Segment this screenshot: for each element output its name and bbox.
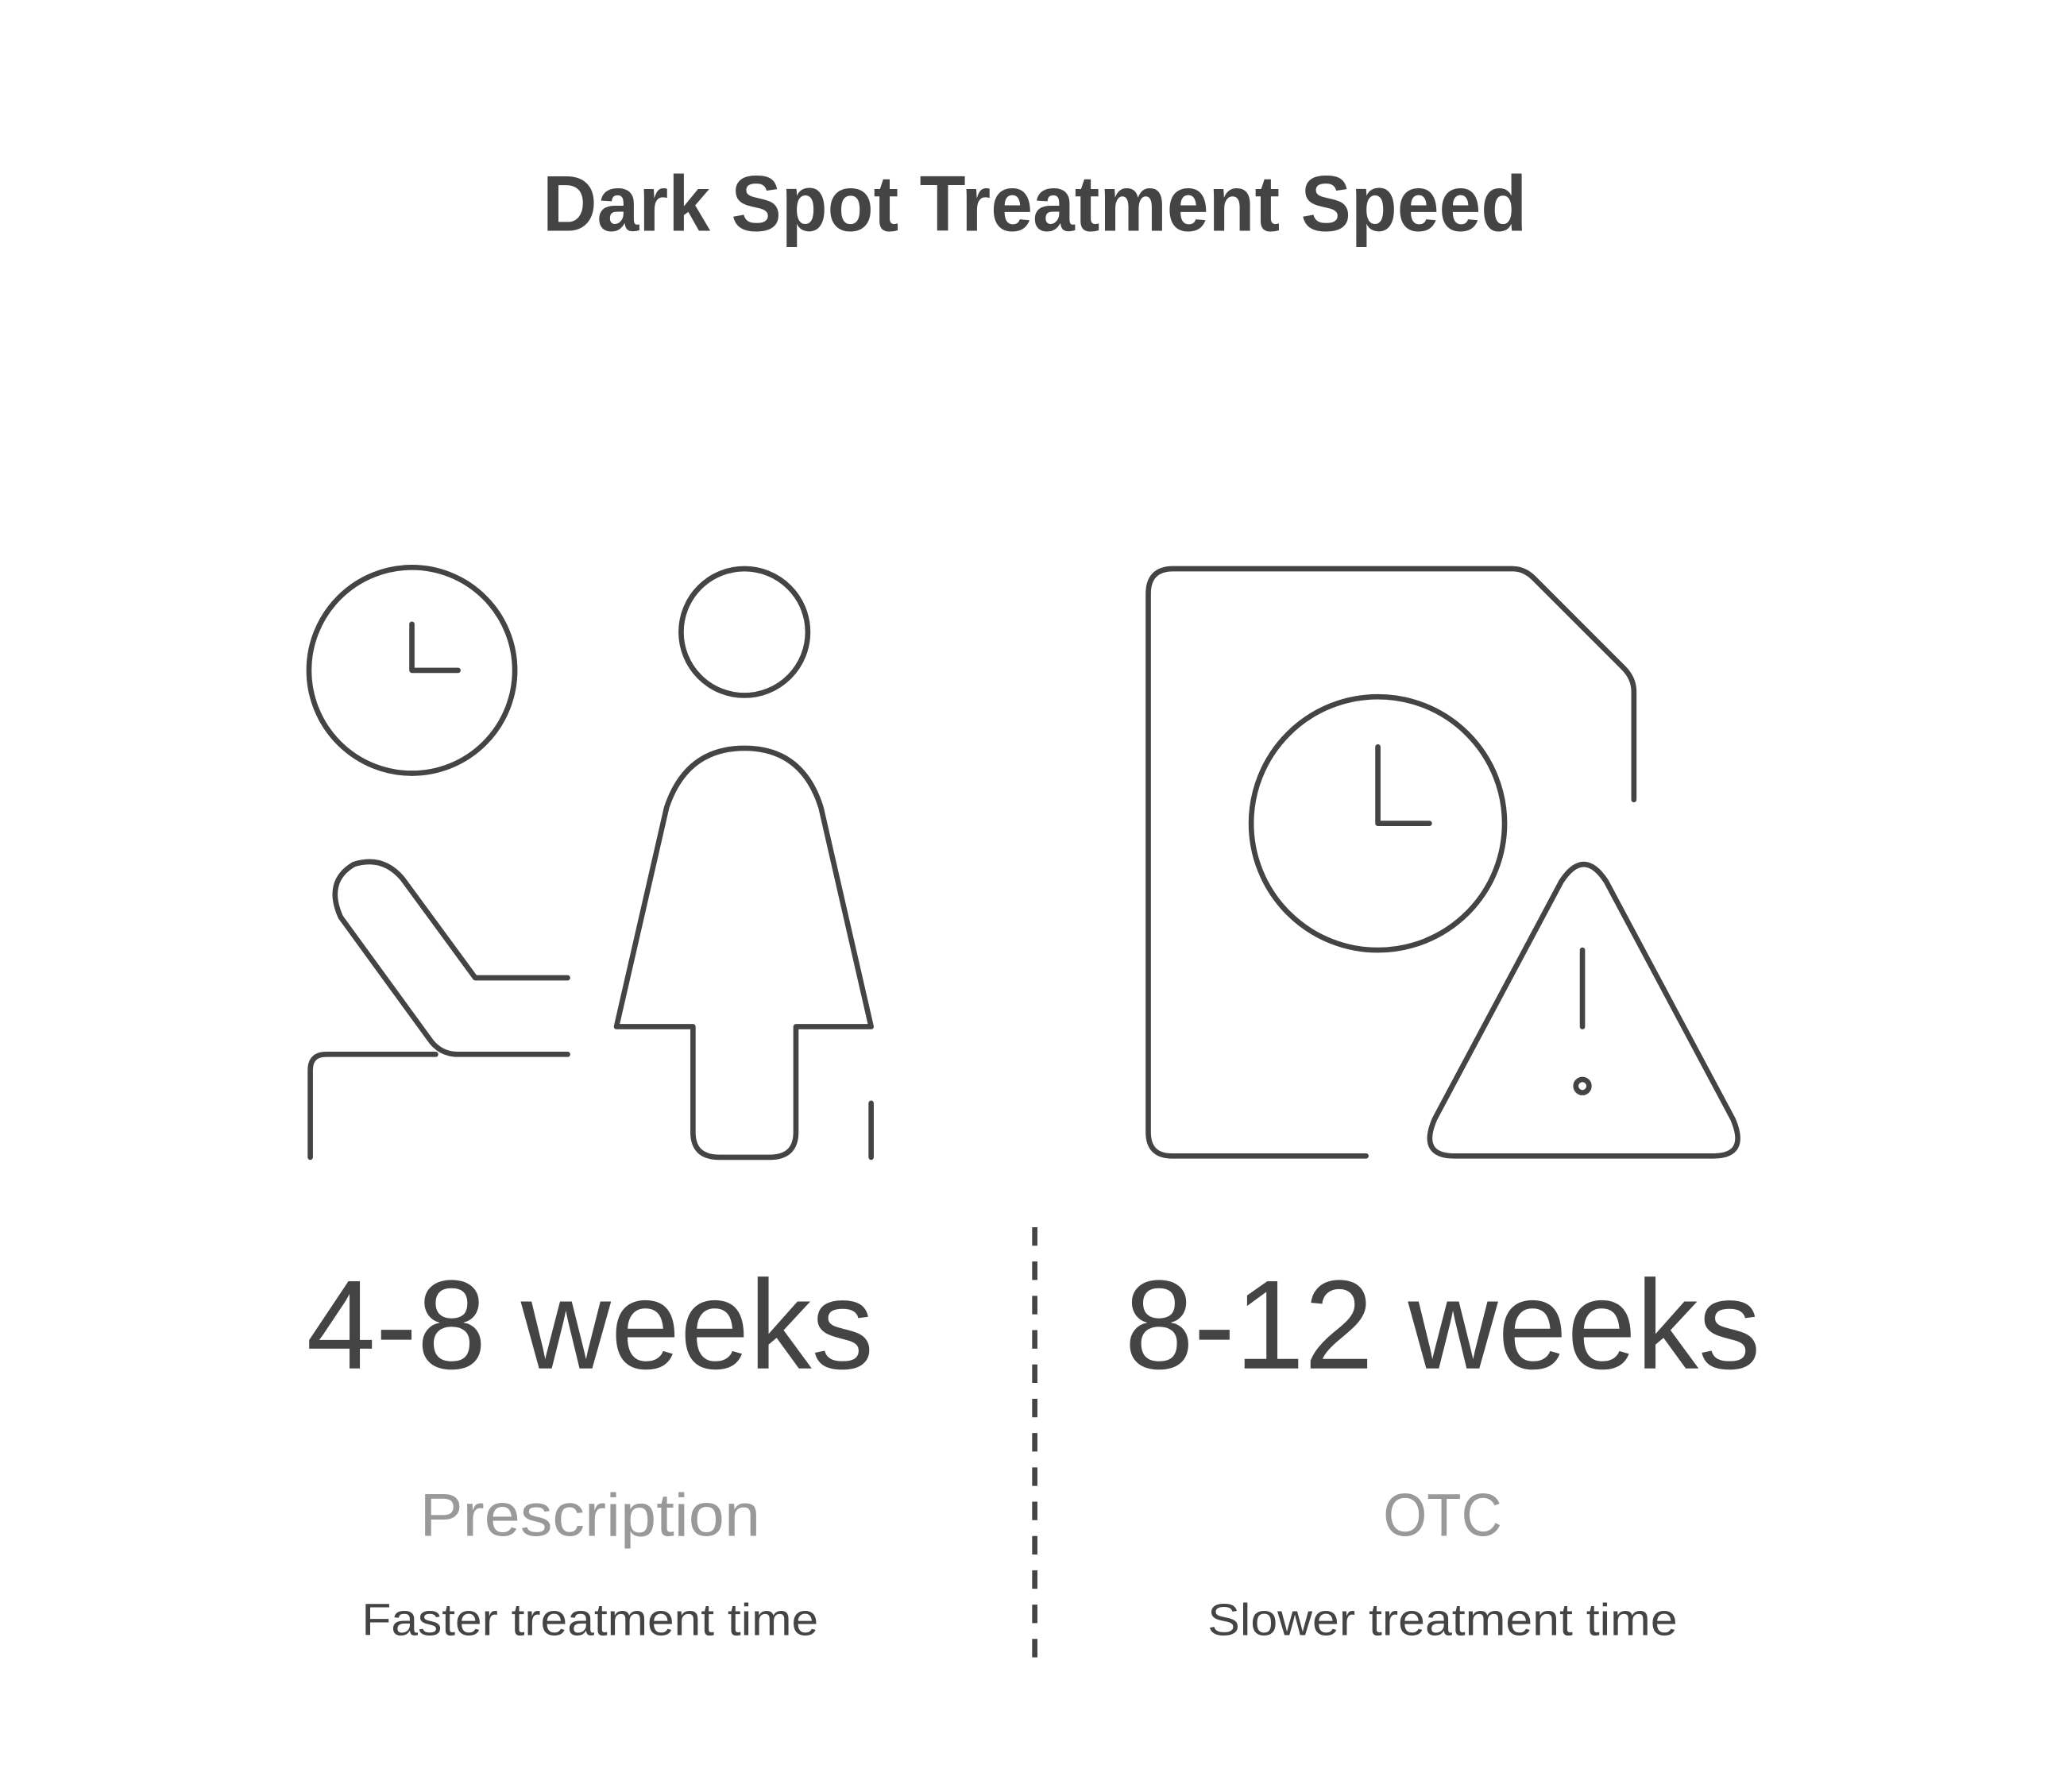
icon: patient figure — [616, 569, 871, 1157]
icon: document — [1149, 569, 1634, 1156]
description: Slower treatment time — [1207, 1594, 1678, 1644]
title: Dark Spot Treatment Speed — [543, 160, 1527, 249]
icon: doctor at desk — [311, 862, 568, 1157]
icon: OTC document with clock and warning — [1149, 569, 1738, 1156]
icon: prescription consultation — [309, 567, 871, 1157]
icon: wall clock — [309, 567, 515, 774]
panel: OTC — [1125, 1254, 1760, 1644]
icon: clock — [1251, 697, 1505, 950]
stat: 8-12 weeks: 8-12 weeks — [1125, 1254, 1760, 1396]
panel: prescription — [307, 1254, 874, 1644]
icon: warning triangle — [1430, 864, 1738, 1156]
description: Faster treatment time — [361, 1594, 818, 1644]
label: OTC: OTC — [1383, 1482, 1502, 1550]
divider dashed — [1033, 1227, 1037, 1670]
stat: 4-8 weeks: 4-8 weeks — [307, 1254, 874, 1396]
label: prescription: Prescription — [419, 1482, 760, 1550]
